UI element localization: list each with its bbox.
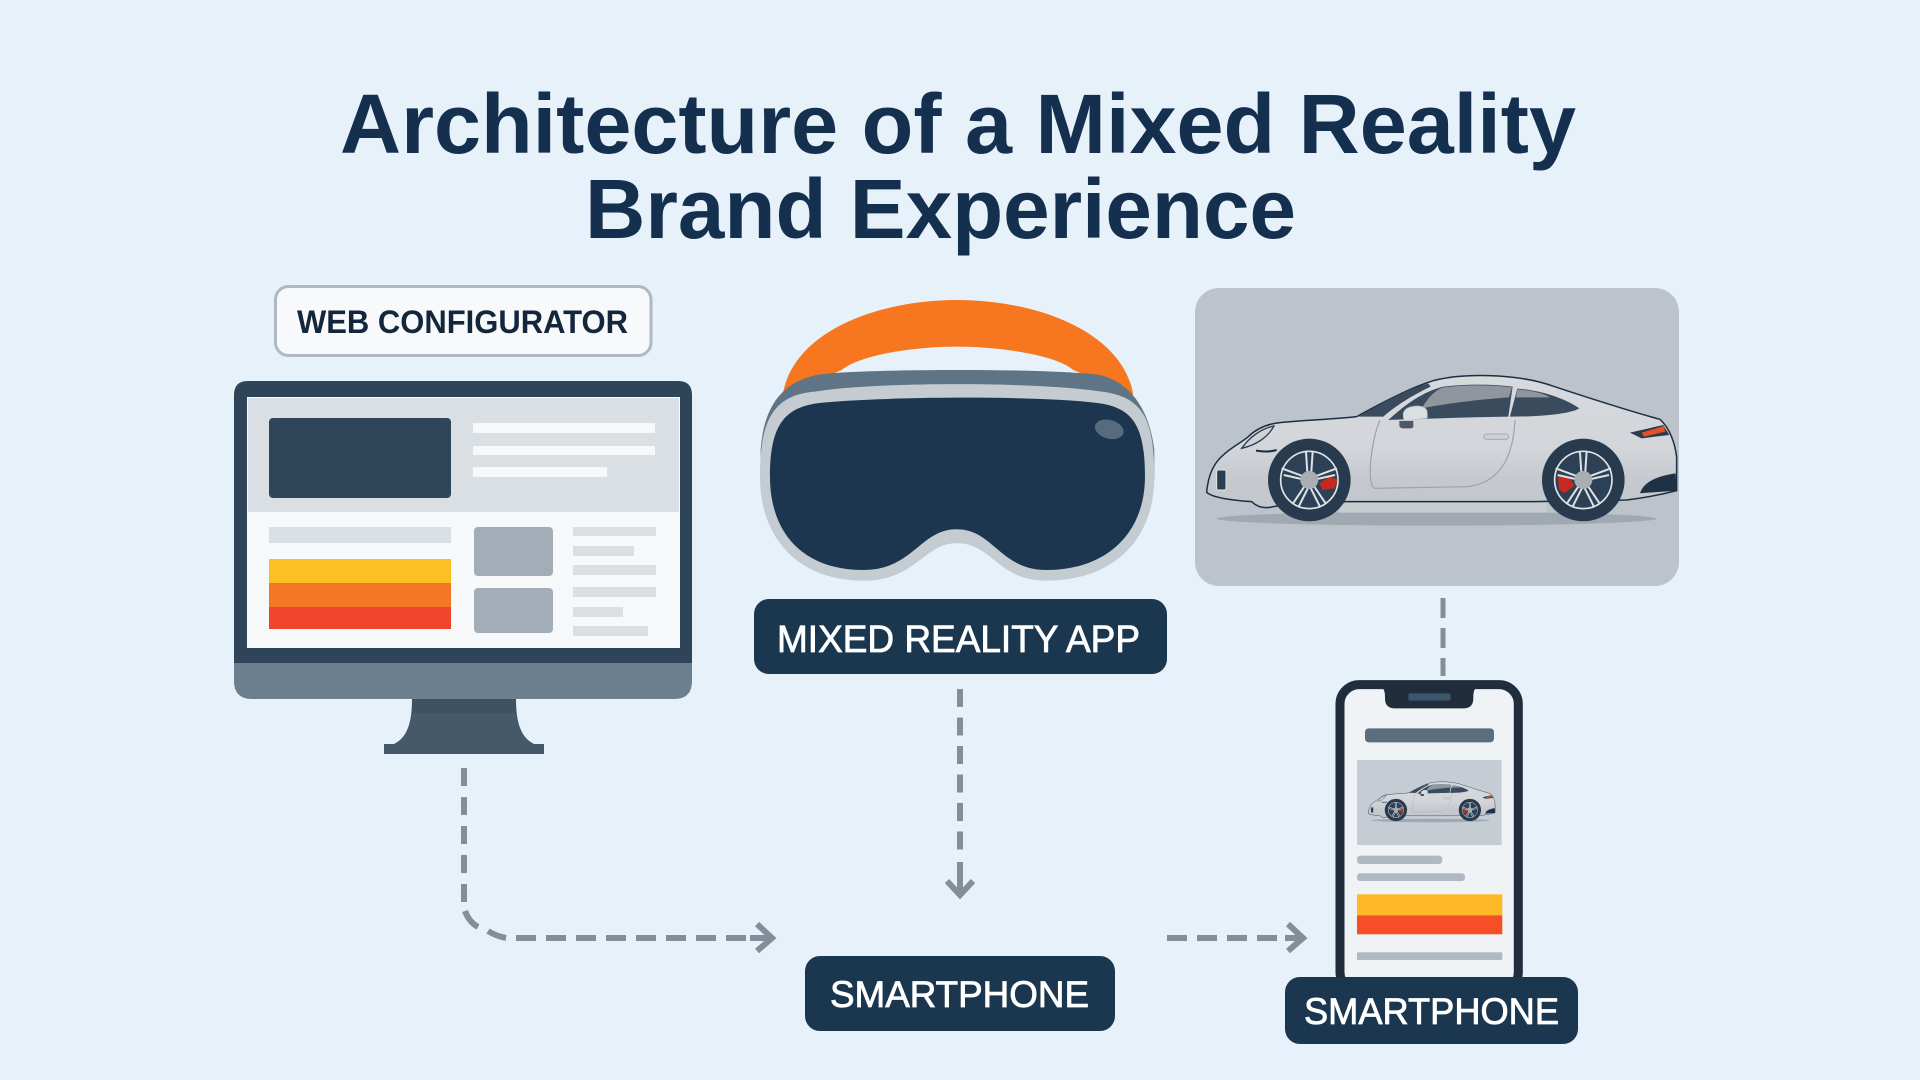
car underbody strip	[1340, 503, 1547, 513]
side window	[1388, 385, 1513, 420]
rear window	[1510, 389, 1579, 417]
label: smartphone (right)	[1285, 977, 1578, 1044]
phone casing	[1340, 685, 1518, 991]
colour option stripes	[269, 527, 451, 629]
app text bars	[1357, 856, 1502, 960]
title	[340, 77, 1576, 256]
front wheel	[1268, 439, 1351, 521]
app colour bars	[1357, 894, 1502, 934]
label: smartphone (centre): SMARTPHONE	[830, 974, 1089, 1015]
windshield	[1358, 383, 1431, 417]
hero block	[269, 418, 451, 498]
headset bezel	[760, 384, 1154, 581]
label: smartphone (centre)	[805, 956, 1115, 1031]
arrow: smartphone to phone	[1167, 924, 1303, 951]
thumbnails	[474, 527, 553, 633]
headlight	[1242, 426, 1274, 448]
label: smartphone (right): SMARTPHONE	[1304, 991, 1559, 1032]
arrow: monitor to smartphone	[464, 768, 772, 951]
label: web configurator	[276, 286, 651, 356]
mirror	[1399, 421, 1413, 428]
door handle	[1484, 434, 1509, 439]
front intake	[1217, 470, 1226, 490]
label: web configurator: WEB CONFIGURATOR	[297, 304, 628, 340]
monitor screen	[247, 397, 680, 648]
rear wheel	[1542, 439, 1625, 521]
car shadow	[1217, 512, 1657, 526]
arrow: app to smartphone	[947, 689, 973, 895]
headset strap	[783, 300, 1133, 395]
door outline	[1370, 420, 1515, 488]
app header bar	[1365, 728, 1494, 742]
rear bumper insert	[1640, 473, 1677, 493]
connector: car to phone	[1440, 598, 1446, 676]
panel: car image	[1195, 288, 1679, 586]
hero text lines	[473, 423, 655, 477]
app car image	[1357, 760, 1502, 845]
list lines	[573, 527, 656, 636]
phone notch	[1380, 687, 1478, 708]
mini car	[1368, 782, 1495, 822]
visor highlight	[1093, 417, 1126, 442]
icon: smartphone	[1340, 685, 1518, 991]
icon: sports car	[1207, 375, 1677, 526]
icon: desktop monitor	[234, 381, 692, 754]
title: Brand Experience	[585, 162, 1296, 256]
title: Architecture of a Mixed Reality	[340, 77, 1576, 171]
icon: mixed reality headset	[760, 300, 1154, 581]
tail light	[1630, 425, 1669, 438]
monitor casing	[234, 381, 692, 663]
headset visor	[770, 398, 1145, 570]
label: mixed reality app: MIXED REALITY APP	[777, 619, 1140, 661]
headset band	[761, 370, 1154, 480]
monitor stand	[384, 699, 544, 754]
label: mixed reality app	[754, 599, 1167, 674]
car body	[1207, 375, 1677, 508]
